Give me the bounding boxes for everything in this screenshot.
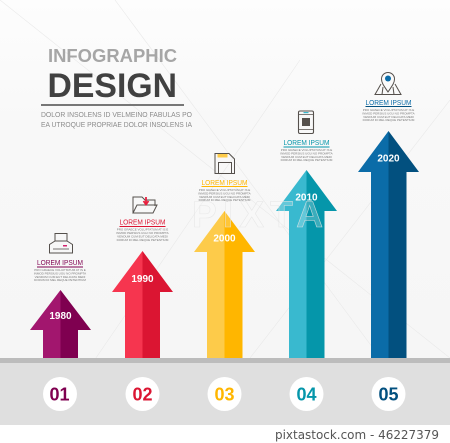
text block 2: DORUM DI MEL REQUE PETENTIUM xyxy=(117,238,169,242)
icon: smartphone xyxy=(298,111,314,134)
heading: infographic: INFOGRAPHIC xyxy=(48,45,177,66)
text block 4: VENDUM CUM EUT DELICATA MEDI xyxy=(281,155,332,159)
heading: design: DESIGN xyxy=(48,67,177,105)
arrow 3: 2000: 2000 xyxy=(213,234,236,244)
icon: printer xyxy=(50,234,72,253)
text block 2: PRO GRAECE VOLUPTATUM AT IS E xyxy=(117,228,168,232)
text block 3: LOREM IPSUM xyxy=(202,178,248,187)
text block 1: LOREM IPSUM xyxy=(37,258,83,267)
icon: floppy disk xyxy=(215,154,234,174)
text block 2: VENDUM CUM EUT DELICATA MEDI xyxy=(117,234,168,238)
text block 1 xyxy=(34,258,86,282)
text block 5: VENDUM CUM EUT DELICATA MEDI xyxy=(363,115,414,119)
arrow 1: 1980: 1980 xyxy=(49,311,72,322)
text block 4 xyxy=(280,138,333,162)
number badge 03 xyxy=(208,377,242,411)
stock credit: pixtastock.com - 46227379 xyxy=(275,428,439,442)
text block 5: PRO GRAECE VOLUPTATUM AT IS E xyxy=(363,108,414,112)
arrow 4: 2010 xyxy=(276,170,337,358)
number badge 05: 05 xyxy=(378,384,399,404)
text block 1: DORUM DI MEL REQUE PETENTIUM xyxy=(34,278,86,282)
watermark: PIXTA xyxy=(192,194,323,235)
number badge 01 xyxy=(43,377,77,411)
subtitle: EA UTROQUE PROPRIAE DOLOR INSOLENS IA xyxy=(41,122,192,129)
icon: map pin xyxy=(375,72,401,94)
arrow 3: 2000 xyxy=(194,211,255,358)
number badge 02 xyxy=(126,377,160,411)
arrow 5: 2020 xyxy=(358,131,419,358)
text block 5 xyxy=(362,98,415,122)
text block 3: PRO GRAECE VOLUPTATUM AT IS E xyxy=(199,188,250,192)
text block 2: LOREM IPSUM xyxy=(120,218,166,226)
text block 3: INMOD PERSIUS UGU NO PROMPTA xyxy=(198,191,251,195)
text block 1: INMOD PERSIUS UGU NO PROMPTA xyxy=(34,271,86,275)
text block 2: INMOD PERSIUS UGU NO PROMPTA xyxy=(116,231,169,235)
arrow 4: 2010: 2010 xyxy=(295,192,318,204)
text block 4: DORUM DI MEL REQUE PETENTIUM xyxy=(281,158,333,162)
text block 4: INMOD PERSIUS UGU NO PROMPTA xyxy=(280,151,333,155)
number badge 01: 01 xyxy=(49,384,70,404)
text block 3 xyxy=(198,178,251,202)
title block xyxy=(41,45,193,129)
text block 5: INMOD PERSIUS UGU NO PROMPTA xyxy=(362,111,415,115)
arrow 1: 1980 xyxy=(30,290,91,358)
text block 4: PRO GRAECE VOLUPTATUM AT IS E xyxy=(281,148,332,152)
arrow 2: 1990 xyxy=(112,251,173,358)
arrow 5: 2020: 2020 xyxy=(377,154,400,164)
arrow 2: 1990: 1990 xyxy=(131,274,154,285)
number badge 05 xyxy=(372,377,406,411)
text block 2 xyxy=(116,218,169,242)
text block 5: DORUM DI MEL REQUE PETENTIUM xyxy=(363,118,415,122)
subtitle: DOLOR INSOLENS ID VELMEINO FABULAS PO xyxy=(41,112,193,119)
text block 1: VENDUM CUM EUT DELICATA MEDI xyxy=(35,275,86,279)
ground band xyxy=(0,358,450,425)
number badge 03: 03 xyxy=(214,384,235,404)
text block 3: DORUM DI MEL REQUE PETENTIUM xyxy=(199,198,251,202)
number badge 04 xyxy=(290,377,324,411)
text block 4: LOREM IPSUM xyxy=(284,138,330,147)
number badge 04: 04 xyxy=(296,384,317,404)
text block 1: PRO GRAECE VOLUPTATUM AT IS E xyxy=(34,268,86,272)
number badge 02: 02 xyxy=(132,384,153,404)
text block 5: LOREM IPSUM xyxy=(366,98,412,107)
text block 3: VENDUM CUM EUT DELICATA MEDI xyxy=(199,195,250,199)
icon: folder xyxy=(133,197,157,213)
subtitle xyxy=(41,112,193,129)
